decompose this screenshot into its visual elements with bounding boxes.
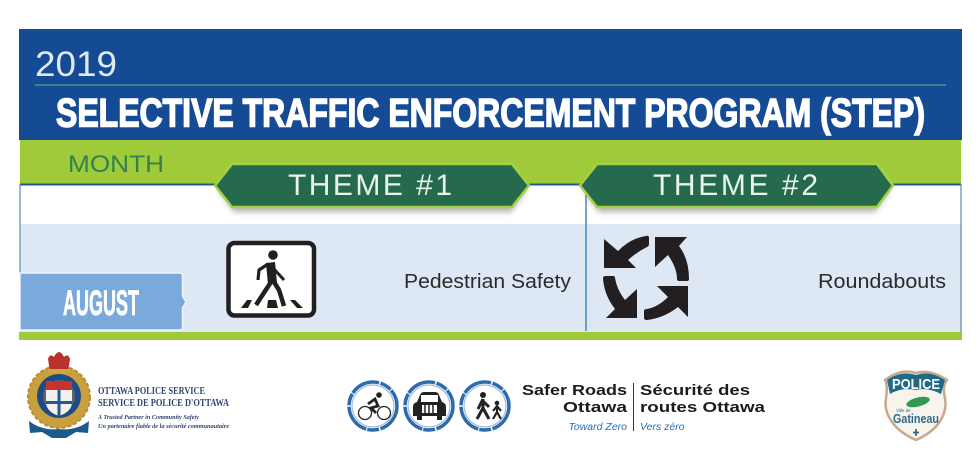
logo text: Safer Roads Ottawa [522,382,766,433]
month tag: August [20,273,186,330]
logo text: Ottawa Police Service: SERVICE DE POLICE D'OTTAWA [98,398,229,409]
month heading: MONTH [68,151,164,178]
theme 1 ribbon [215,164,529,212]
theme 1 ribbon: THEME #1 [288,169,452,202]
logo text: Ottawa Police Service: OTTAWA POLICE SERVICE [98,386,205,397]
logo: Gatineau police badge: Gatineau [893,411,939,426]
logo text: Safer Roads Ottawa: Safer Roads [522,382,627,399]
logo text: Safer Roads Ottawa: Vers zéro [640,421,685,433]
label: Pedestrian Safety: Pedestrian Safety [404,271,571,293]
logo: Gatineau police badge: POLICE [892,376,940,393]
logo text: Ottawa Police Service: A Trusted Partner in Community Safety [97,415,199,421]
theme 2 ribbon [580,164,893,212]
label: Roundabouts: Roundabouts [818,271,946,293]
month tag: August: AUGUST [63,284,139,323]
icon: roundabout arrows [603,236,689,320]
logo text: Ottawa Police Service: Un partenaire fiable de la sécurité communautaire [98,424,229,430]
logo: pedestrians circle [461,382,509,430]
logo: Ottawa Police crest [28,352,90,438]
theme 2 ribbon: THEME #2 [653,169,818,202]
logo text: Safer Roads Ottawa: Ottawa [563,399,628,416]
logo text: Safer Roads Ottawa: Sécurité des [640,382,750,399]
year: 2019 [35,45,117,84]
table [19,140,962,340]
logo text: Safer Roads Ottawa: routes Ottawa [640,399,766,416]
logo: car circle [405,382,453,430]
logo text: Ottawa Police Service [97,386,229,430]
icon: pedestrian crossing [228,243,314,316]
logo: cyclist circle [349,382,397,430]
header banner [19,29,962,140]
logo: Gatineau police badge [885,372,947,440]
logo text: Safer Roads Ottawa: Toward Zero [568,421,627,433]
logo: Gatineau police badge: Ville de [896,408,911,413]
